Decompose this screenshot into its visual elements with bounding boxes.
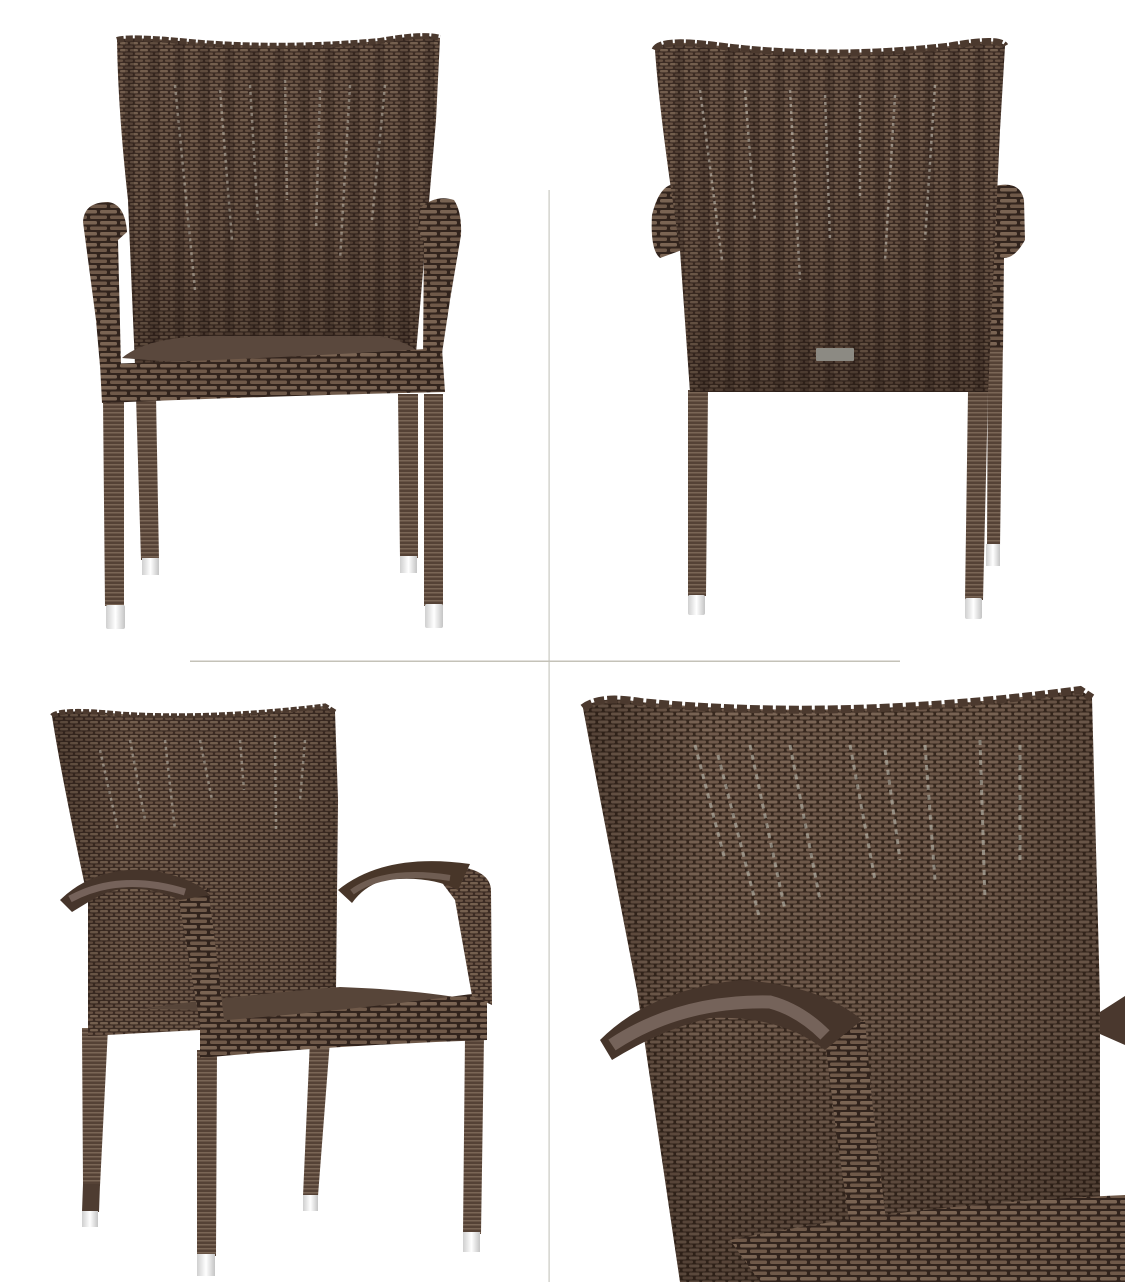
seat top: three-quarter view [130,987,472,1022]
near arm: three-quarter view [60,870,224,1024]
seat rail: front view [100,348,445,403]
arm: close-up [600,980,890,1262]
brand label [816,348,854,361]
seat top: front view [122,336,420,368]
panel: front view chair [83,30,461,629]
left arm: rear view [652,184,682,258]
right arm: rear view [990,185,1025,350]
left arm: front view [83,202,127,366]
panel divider: vertical [548,190,550,1282]
left seat rail [88,1008,200,1036]
chair back: front view [110,30,450,370]
chair back: rear view [650,30,1010,400]
chair legs: front view [103,394,443,629]
chair back: three-quarter view [50,703,338,1009]
far arm: three-quarter view [338,861,492,1005]
chair back: close-up [580,690,1105,1282]
right arm: front view [418,198,461,360]
front seat rail [200,992,487,1058]
panel: close-up of chair back [580,690,1125,1282]
chair legs: three-quarter view [82,1028,484,1276]
seat: close-up [730,1195,1125,1282]
panel: rear view chair [650,30,1025,619]
panel divider: horizontal [190,660,900,662]
panel: three-quarter view chair [50,700,492,1276]
far arm stub: close-up [1100,996,1125,1045]
chair legs: rear view [688,340,1003,619]
